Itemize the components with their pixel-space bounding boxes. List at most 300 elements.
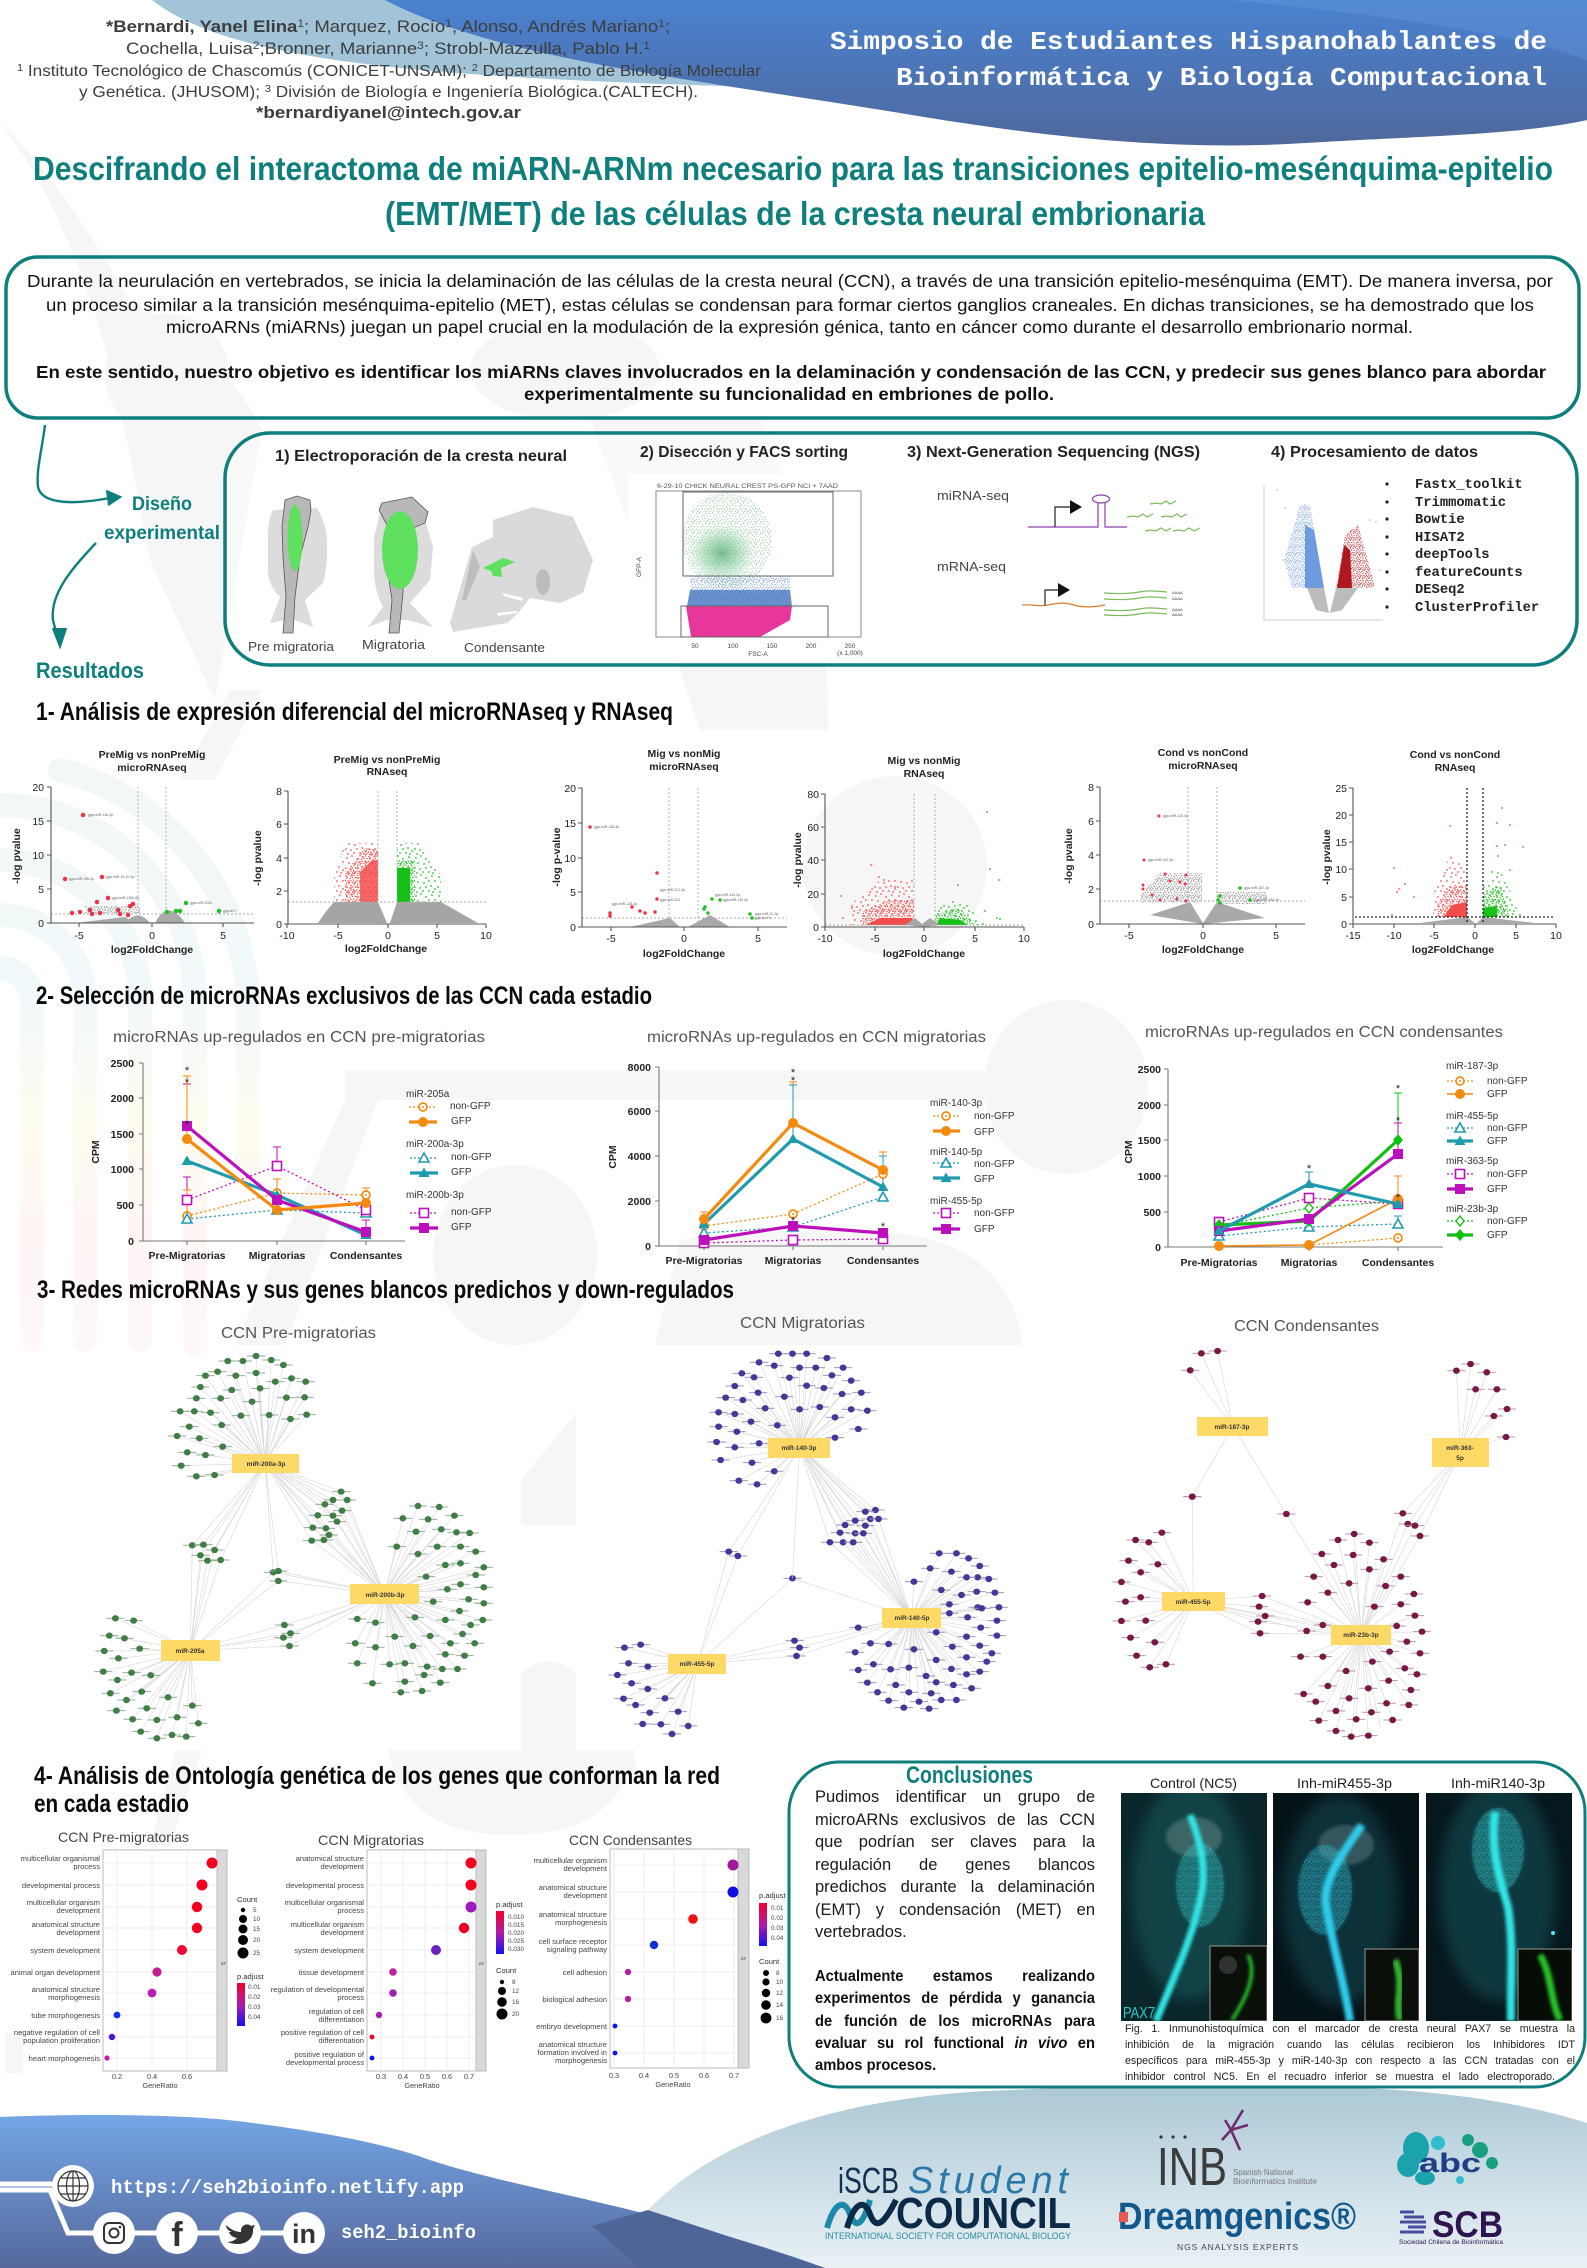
volcano: Cond microRNAseq	[1063, 747, 1305, 956]
tools list: Trimmomatic	[1415, 495, 1506, 511]
dot plot: migratory: multicellular organismal	[285, 1898, 364, 1907]
NGS schematic: AAAA	[1172, 612, 1183, 617]
volcano: Cond RNAseq: 5	[1341, 892, 1347, 904]
arrow: experimental design to results	[53, 543, 96, 646]
line chart: condensing: Migratorias	[1281, 1257, 1337, 1269]
conclusions heading: Conclusiones	[906, 1762, 1033, 1789]
micrograph: inhibitor 140	[1426, 1780, 1572, 2021]
volcano: Cond RNAseq: 10	[1335, 864, 1347, 876]
panel: introduction: un proceso similar a la transición mesénquima-epitelio (MET), estas células se condensan para formar ciertos ganglios craneales. En dichas transiciones, se ha demostrado que los	[46, 295, 1534, 315]
step headings: 3) Next-Generation Sequencing (NGS)	[907, 444, 1200, 461]
conclusions text: predichos durante la delaminación	[815, 1878, 1095, 1896]
icon: twitter	[219, 2212, 261, 2254]
line chart: migratory: *	[791, 1075, 796, 1087]
authors block: Departamento de Biología Molecular	[478, 63, 761, 80]
legend: pre-migratory: miR-200a-3p	[406, 1139, 464, 1150]
line chart: migratory	[607, 1029, 986, 1267]
volcano: Cond RNAseq: RNAseq	[1435, 762, 1475, 774]
miRNA hubs: migratory: miR-455-5p	[679, 1661, 715, 1668]
dot plot: pre-migratory: BP	[221, 1961, 227, 1966]
volcano: Cond microRNAseq: gga-miR-184-3p	[1254, 898, 1279, 902]
micrograph: inhibitor 455	[1273, 1793, 1419, 2021]
volcano: PreMig RNAseq: 4	[276, 853, 282, 865]
volcano: Cond microRNAseq: 0	[1200, 930, 1206, 942]
legend: condensing: non-GFP	[1487, 1123, 1528, 1134]
dot plot: migratory: regulation of cell	[309, 2007, 364, 2016]
line chart: condensing: *	[1396, 1083, 1401, 1095]
volcano: Cond RNAseq: -15	[1345, 930, 1361, 942]
volcano: PreMig microRNAseq: log2FoldChange	[111, 944, 193, 956]
legend: pre-migratory: GFP	[451, 1116, 472, 1127]
legend: pre-migratory: miR-200b-3p	[406, 1190, 464, 1201]
dot plot: condensing: anatomical structure	[539, 2040, 607, 2049]
legend: pre-migratory	[406, 1089, 492, 1233]
volcano: PreMig microRNAseq: 0	[149, 930, 155, 942]
FACS plot: 100	[728, 643, 739, 650]
logo: INB: INB	[1157, 2137, 1227, 2197]
panel: conclusions	[789, 1762, 1585, 2087]
legend: migratory: miR-140-3p	[930, 1098, 983, 1109]
volcano: PreMig RNAseq: 0	[276, 919, 282, 931]
authors block: División de Biología e Ingeniería Biológica.(CALTECH).	[271, 84, 698, 101]
volcano: Mig microRNAseq: microRNAseq	[649, 761, 719, 773]
logo: ISCB Student Council	[825, 2160, 1072, 2242]
miRNA hubs: pre-migratory: miR-205a	[176, 1648, 205, 1655]
volcano: Mig RNAseq: 60	[807, 822, 819, 834]
line chart: migratory: 2000	[628, 1196, 651, 1208]
dot plot: migratory: developmental process	[286, 2058, 364, 2067]
volcano: Cond RNAseq: log2FoldChange	[1412, 944, 1494, 956]
dot plot: migratory: system development	[294, 1946, 365, 1955]
logo: INB: Bioinformatics Institute	[1233, 2177, 1318, 2186]
dot plot legend: migratory: 0.015	[508, 1922, 524, 1929]
line chart: migratory: 8000	[628, 1062, 651, 1074]
dot plot legend: condensing: 8	[776, 1970, 780, 1977]
miRNA hubs: condensing: miR-455-5p	[1175, 1599, 1211, 1606]
dot plot: condensing: formation involved in	[537, 2048, 607, 2057]
dot plot: condensing: biological adhesion	[542, 1995, 607, 2004]
legend: migratory: non-GFP	[974, 1111, 1015, 1122]
volcano: Cond RNAseq: 15	[1335, 837, 1347, 849]
volcano: PreMig RNAseq: 0	[385, 930, 391, 942]
line chart: pre-migratory: 2500	[111, 1058, 134, 1070]
dot plot: pre-migratory: anatomical structure	[32, 1985, 100, 1994]
line chart: pre-migratory: *	[185, 1077, 190, 1089]
volcano: PreMig microRNAseq: -5	[74, 930, 84, 942]
dot plot: condensing: signaling pathway	[547, 1945, 607, 1954]
step headings	[275, 444, 1478, 465]
legend: condensing: non-GFP	[1487, 1076, 1528, 1087]
dot plot legend: migratory: 0.025	[508, 1938, 524, 1945]
ongoing work text: ambos procesos.	[815, 2057, 936, 2074]
NGS schematic: mRNA-seq	[937, 560, 1006, 574]
network: migratory: CCN Migratorias	[740, 1315, 865, 1332]
legend: pre-migratory: miR-205a	[406, 1089, 450, 1100]
line chart: migratory: Migratorias	[765, 1255, 821, 1267]
legend: migratory	[930, 1098, 1015, 1235]
tools list: DESeq2	[1415, 583, 1465, 598]
dot plot: condensing: 0.3	[609, 2071, 619, 2080]
dot plot legend: pre-migratory: 20	[253, 1937, 261, 1944]
ongoing work text: Actualmente estamos realizando	[815, 1968, 1095, 1985]
FACS plot: 50	[691, 643, 699, 650]
volcano: PreMig microRNAseq: 20	[32, 782, 44, 794]
embryo labels: Pre migratoria	[248, 640, 334, 654]
volcano: Cond microRNAseq: -5	[1124, 930, 1134, 942]
dot plot: pre-migratory: developmental process	[22, 1881, 100, 1890]
volcano: Mig RNAseq: RNAseq	[904, 768, 944, 780]
legend: condensing: non-GFP	[1487, 1216, 1528, 1227]
volcano: Cond microRNAseq: 0	[1088, 919, 1094, 931]
panel: experimental design	[225, 433, 1577, 665]
tools list: Bowtie	[1415, 512, 1465, 528]
figure caption: inhibidor control NC5. En el recuadro inferior se muestra el lado electroporado.	[1125, 2071, 1555, 2083]
experimental design label	[104, 494, 220, 544]
line chart: pre-migratory: Migratorias	[249, 1250, 305, 1262]
figure caption: específicos para miR-455-3p y miR-140-3p con respecto a las CCN tratadas con el	[1125, 2055, 1575, 2067]
volcano: PreMig microRNAseq: PreMig vs nonPreMig	[99, 749, 205, 761]
dot plot legend: condensing: 12	[776, 1990, 784, 1997]
network: pre-migratory	[103, 1325, 484, 1738]
conclusions text: vertebrados.	[815, 1923, 907, 1941]
dot plot: pre-migratory: 0.2	[112, 2072, 122, 2081]
dot plot: pre-migratory: 0.4	[147, 2072, 157, 2081]
conclusions text	[815, 1788, 1096, 1941]
line chart: migratory: 6000	[628, 1106, 651, 1118]
volcano: PreMig RNAseq: 5	[434, 930, 440, 942]
legend: pre-migratory: GFP	[451, 1167, 472, 1178]
volcano: Mig microRNAseq	[551, 748, 787, 960]
dot plot: condensing: embryo development	[536, 2022, 608, 2031]
icon: linkedin: in	[292, 2219, 316, 2249]
legend: pre-migratory: GFP	[451, 1222, 472, 1233]
miRNA hubs: migratory: miR-140-5p	[894, 1615, 930, 1622]
step headings: 2) Disección y FACS sorting	[640, 444, 848, 461]
dot plot: pre-migratory: system development	[30, 1946, 101, 1955]
header wave	[152, 0, 1587, 145]
miRNA hubs: migratory	[668, 1438, 941, 1674]
FACS plot: 250	[845, 643, 856, 650]
dot plot legend: migratory: 0.020	[508, 1930, 524, 1937]
volcano: PreMig microRNAseq: 5	[220, 930, 226, 942]
dot plot legend: migratory	[496, 1900, 524, 2020]
dot plot: migratory: GeneRatio	[404, 2081, 440, 2090]
mini volcano plot	[1264, 485, 1383, 620]
line chart: migratory: Condensantes	[847, 1255, 919, 1267]
logo: ABC	[1397, 2132, 1498, 2185]
dot plot: pre-migratory: multicellular organismal	[21, 1854, 100, 1863]
NGS schematic: AAAA	[1172, 607, 1183, 612]
volcano: Mig RNAseq: 0	[921, 933, 927, 945]
dot plot: pre-migratory: development	[57, 1928, 101, 1937]
dot plot: migratory: positive regulation of	[294, 2050, 365, 2059]
dot plot legend: migratory: 0.010	[508, 1914, 524, 1921]
main title	[33, 150, 1553, 232]
volcano: Cond RNAseq: 5	[1513, 930, 1519, 942]
dot plot: condensing: morphogenesis	[555, 1918, 607, 1927]
panel: introduction: experimentalmente su funcionalidad en embriones de pollo.	[524, 384, 1054, 404]
logo: Dreamgenics	[1118, 2196, 1356, 2252]
icon: facebook: f	[171, 2216, 183, 2254]
dot plot: condensing: anatomical structure	[539, 1910, 607, 1919]
figure caption: Fig. 1. Inmunohistoquímica con el marcador de cresta neural PAX7 se muestra la	[1125, 2023, 1575, 2035]
micrograph titles: Control (NC5)	[1150, 1775, 1237, 1791]
line chart: pre-migratory	[90, 1029, 485, 1262]
dot plot: pre-migratory: GeneRatio	[142, 2081, 178, 2090]
dot plot: condensing: 0.5	[669, 2071, 679, 2080]
section heading 4	[34, 1762, 720, 1818]
dot plot: migratory: 0.5	[420, 2072, 430, 2081]
section heading 1: 1- Análisis de expresión diferencial del microRNAseq y RNAseq	[36, 698, 673, 726]
dot plot legend: migratory: 12	[512, 1988, 520, 1995]
FACS plot: (x 1,000)	[837, 650, 863, 657]
volcano: Mig microRNAseq: gga-let-7b	[755, 916, 771, 920]
volcano: Cond microRNAseq: Cond vs nonCond	[1158, 747, 1248, 759]
NGS schematic: AAAA	[1172, 596, 1183, 601]
line chart: condensing: *	[1307, 1163, 1312, 1175]
ongoing work text: experimentos de pérdida y ganancia	[815, 1990, 1095, 2007]
volcano: PreMig microRNAseq: microRNAseq	[117, 762, 187, 774]
FACS plot	[628, 474, 872, 662]
authors block: 1	[297, 18, 304, 30]
dot plot: migratory: developmental process	[286, 1881, 364, 1890]
line chart: pre-migratory: 1500	[111, 1129, 134, 1141]
volcano: Cond RNAseq: -10	[1386, 930, 1402, 942]
dot plot: condensing: 0.6	[699, 2071, 709, 2080]
conclusions text: microARNs exclusivos de las CCN	[815, 1810, 1095, 1828]
logo: Dreamgenics: Dreamgenics®	[1118, 2196, 1356, 2238]
volcano: Cond microRNAseq: gga-miR-126-3p	[1163, 814, 1188, 818]
embryo: condensing	[450, 507, 593, 632]
step headings: 1) Electroporación de la cresta neural	[275, 448, 567, 465]
conclusions text: que podrían ser claves para la	[815, 1833, 1095, 1851]
dot plot: migratory: differentiation	[319, 2015, 364, 2024]
dot plot legend: condensing: 0.04	[771, 1935, 784, 1942]
NGS schematic	[937, 489, 1200, 617]
volcano: Mig microRNAseq: gga-miR-138-3p	[594, 825, 619, 829]
section heading 4: 4- Análisis de Ontología genética de los genes que conforman la red	[34, 1762, 720, 1790]
dot plot: migratory: process	[337, 1906, 364, 1915]
ongoing work text	[815, 1968, 1096, 2074]
volcano: Cond RNAseq: -5	[1429, 930, 1439, 942]
miRNA hubs: pre-migratory: miR-200b-3p	[365, 1592, 405, 1599]
volcano: Mig RNAseq	[792, 755, 1030, 960]
PAX7 label: PAX7	[1123, 2005, 1155, 2022]
volcano: Cond microRNAseq: 5	[1273, 930, 1279, 942]
volcano: PreMig microRNAseq: gga-miR-19-10-5p	[106, 875, 134, 879]
logo: ABC: abc	[1419, 2148, 1481, 2178]
authors block	[17, 17, 761, 122]
legend: migratory: GFP	[974, 1127, 995, 1138]
dot plot: pre-migratory: multicellular organism	[27, 1898, 100, 1907]
dot plot: migratory: 0.4	[398, 2072, 408, 2081]
bottom band: contact background	[0, 2115, 825, 2268]
dot plot legend: condensing: 0.02	[771, 1915, 784, 1922]
line chart: migratory: Pre-Migratorias	[665, 1255, 743, 1267]
dot plot: migratory: development	[321, 1862, 365, 1871]
experimental design label: experimental	[104, 523, 220, 544]
network: condensing	[1121, 1318, 1507, 1737]
line chart: condensing: *	[1396, 1192, 1401, 1204]
dot plot: migratory: multicellular organism	[291, 1920, 364, 1929]
volcano: PreMig RNAseq: -10	[279, 930, 295, 942]
miRNA hubs: condensing: miR-23b-3p	[1343, 1632, 1379, 1639]
volcano: PreMig RNAseq: -log pvalue	[252, 830, 264, 886]
line chart: migratory: *	[791, 1215, 796, 1227]
logo: SCB: SCB	[1432, 2204, 1503, 2245]
miRNA hubs: migratory: miR-140-3p	[781, 1445, 817, 1452]
micrograph titles	[1150, 1775, 1545, 1791]
dot plot legend: condensing: 10	[776, 1979, 784, 1986]
line chart: pre-migratory: 2000	[111, 1093, 134, 1105]
logo: ISCB Student Council: COUNCIL	[896, 2189, 1071, 2238]
dot plot: condensing: development	[564, 1891, 608, 1900]
line chart: condensing: 2500	[1138, 1064, 1161, 1076]
line chart: condensing: 2000	[1138, 1100, 1161, 1112]
volcano: Cond RNAseq	[1321, 749, 1562, 956]
volcano: PreMig microRNAseq: 5	[38, 884, 44, 896]
logo: SCB: Sociedad Chilena de Bioinformática	[1399, 2239, 1503, 2246]
miRNA hubs: pre-migratory	[161, 1454, 419, 1661]
volcano: Cond RNAseq: 25	[1335, 783, 1347, 795]
volcano: Mig RNAseq: -5	[870, 933, 880, 945]
miRNA hubs: condensing	[1162, 1417, 1489, 1645]
results label: Resultados	[36, 658, 144, 683]
panel: introduction: Durante la neurulación en vertebrados, se inicia la delaminación de las células de la cresta neural (CCN), a través de una transición epitelio-mesénquima (EMT). De manera inversa, por	[27, 271, 1553, 291]
dot plot legend: migratory: 0.030	[508, 1946, 524, 1953]
authors block: 1	[445, 18, 452, 30]
dot plot: migratory: BP	[479, 1961, 485, 1966]
legend: condensing: non-GFP	[1487, 1169, 1528, 1180]
line chart: pre-migratory: 1000	[111, 1164, 134, 1176]
line chart: pre-migratory: *	[185, 1119, 190, 1131]
panel: introduction: microARNs (miARNs) juegan un papel crucial en la modulación de la expresión génica, tanto en cáncer como durante el desarrollo embrionario normal.	[166, 317, 1413, 337]
network: condensing: CCN Condensantes	[1234, 1318, 1379, 1335]
authors block: Instituto Tecnológico de Chascomús (CONICET-UNSAM);	[23, 63, 472, 80]
authors block: y Genética. (JHUSOM);	[79, 84, 242, 101]
embryo labels	[248, 638, 545, 655]
dot plot: pre-migratory: heart morphogenesis	[29, 2054, 100, 2063]
volcano: Mig microRNAseq: gga-miR-140-5p	[723, 898, 748, 902]
conclusions text: (EMT) y condensación (MET) en	[815, 1900, 1095, 1918]
line chart: condensing	[1123, 1024, 1503, 1269]
dot plot: condensing: BP	[741, 1956, 747, 1961]
tools list: ClusterProfiler	[1415, 600, 1539, 616]
FACS plot: FSC-A	[748, 651, 768, 658]
dot plot: migratory: positive regulation of cell	[281, 2028, 364, 2037]
dot plot: condensing: 0.4	[639, 2071, 649, 2080]
embryo: migratory	[368, 497, 433, 633]
dot plot legend: migratory: 20	[512, 2011, 520, 2018]
legend: migratory: miR-455-5p	[930, 1196, 983, 1207]
network: pre-migratory: CCN Pre-migratorias	[221, 1325, 376, 1342]
volcano: PreMig RNAseq	[252, 754, 492, 955]
volcano: Cond microRNAseq: 6	[1088, 816, 1094, 828]
volcano: PreMig microRNAseq: gga-miR-130-3p	[88, 813, 113, 817]
authors block: *Bernardi, Yanel Elina	[106, 17, 298, 36]
volcano: Cond RNAseq: 10	[1550, 930, 1562, 942]
dot plot legend: migratory: 8	[512, 1979, 516, 1986]
authors block: *bernardiyanel@intech.gov.ar	[256, 103, 521, 122]
legend: condensing: miR-363-5p	[1446, 1156, 1499, 1167]
FACS plot: GFP-A	[636, 556, 643, 577]
experimental design label: Diseño	[132, 494, 192, 515]
dot plot: migratory: CCN Migratorias	[318, 1832, 424, 1848]
dot plot legend: condensing	[759, 1891, 786, 2023]
dot plot: migratory: differentiation	[319, 2036, 364, 2045]
section heading 3: 3- Redes microRNAs y sus genes blancos predichos y down-regulados	[37, 1276, 734, 1304]
dot plot legend: migratory: p.adjust	[496, 1900, 523, 1909]
volcano: Cond microRNAseq: gga-miR-142-3p	[1148, 858, 1173, 862]
dot plot legend: pre-migratory: Count	[237, 1895, 258, 1904]
authors block: 1	[643, 40, 650, 52]
volcano: Mig microRNAseq: 0	[681, 933, 687, 945]
line chart: pre-migratory: Pre-Migratorias	[148, 1250, 226, 1262]
line chart: migratory: *	[791, 1067, 796, 1079]
dot plot: condensing: CCN Condensantes	[569, 1832, 692, 1848]
line chart: migratory: 0	[645, 1241, 651, 1253]
volcano: PreMig RNAseq: RNAseq	[367, 766, 407, 778]
legend: condensing: miR-23b-3p	[1446, 1204, 1499, 1215]
dot plot legend: pre-migratory: 5	[253, 1907, 257, 1914]
main title: (EMT/MET) de las células de la cresta neural embrionaria	[385, 195, 1206, 232]
logo: ISCB Student Council: iSCB	[838, 2160, 899, 2201]
legend: condensing: miR-187-3p	[1446, 1061, 1499, 1072]
dot plot legend: pre-migratory: 0.03	[248, 2004, 261, 2011]
legend: pre-migratory: non-GFP	[451, 1152, 492, 1163]
tools list: Fastx_toolkit	[1415, 477, 1523, 493]
arrow: intro to experimental design	[38, 425, 120, 505]
dot plot: pre-migratory: animal organ development	[10, 1968, 101, 1977]
legend: condensing: GFP	[1487, 1230, 1508, 1241]
section heading 2: 2- Selección de microRNAs exclusivos de las CCN cada estadio	[36, 982, 652, 1010]
dot plot: condensing: cell adhesion	[563, 1968, 607, 1977]
legend: pre-migratory: non-GFP	[451, 1207, 492, 1218]
line chart: pre-migratory: 0	[128, 1236, 134, 1248]
tools list	[1385, 477, 1539, 616]
dot plot legend: condensing: p.adjust	[759, 1891, 786, 1900]
dot plot: condensing	[534, 1832, 786, 2089]
volcano: Cond microRNAseq: -log pvalue	[1063, 828, 1075, 884]
FACS plot: 6-29-10 CHICK NEURAL CREST PS-GFP NCI + 7AAD	[657, 483, 838, 490]
dot plot: condensing: anatomical structure	[539, 1883, 607, 1892]
legend: pre-migratory: non-GFP	[450, 1101, 491, 1112]
dot plot: condensing: cell surface receptor	[539, 1937, 607, 1946]
legend: condensing: GFP	[1487, 1136, 1508, 1147]
dot plot: pre-migratory: process	[73, 1862, 100, 1871]
dot plot: migratory: anatomical structure	[296, 1854, 364, 1863]
volcano: PreMig RNAseq: -5	[333, 930, 343, 942]
tools list: featureCounts	[1415, 565, 1523, 581]
legend: condensing: GFP	[1487, 1184, 1508, 1195]
volcano: Mig RNAseq: 20	[807, 889, 819, 901]
volcano: Mig microRNAseq: -5	[606, 933, 616, 945]
dot plot: pre-migratory	[10, 1829, 264, 2090]
dot plot legend: condensing: 0.01	[771, 1905, 784, 1912]
dot plot: migratory: tissue development	[299, 1968, 365, 1977]
authors block: Cochella, Luisa	[126, 39, 242, 58]
dot plot legend: condensing: 0.03	[771, 1925, 784, 1932]
legend: migratory: non-GFP	[974, 1208, 1015, 1219]
line chart: condensing: 1500	[1138, 1135, 1161, 1147]
dot plot: condensing: development	[564, 1864, 608, 1873]
legend: migratory: GFP	[974, 1224, 995, 1235]
volcano: PreMig RNAseq: 8	[276, 786, 282, 798]
logo: INB	[1157, 2110, 1318, 2197]
volcano: PreMig microRNAseq: gga-miR-130b-5p	[112, 896, 139, 900]
line chart: migratory: *	[881, 1221, 886, 1233]
background watermark	[0, 122, 1148, 2073]
